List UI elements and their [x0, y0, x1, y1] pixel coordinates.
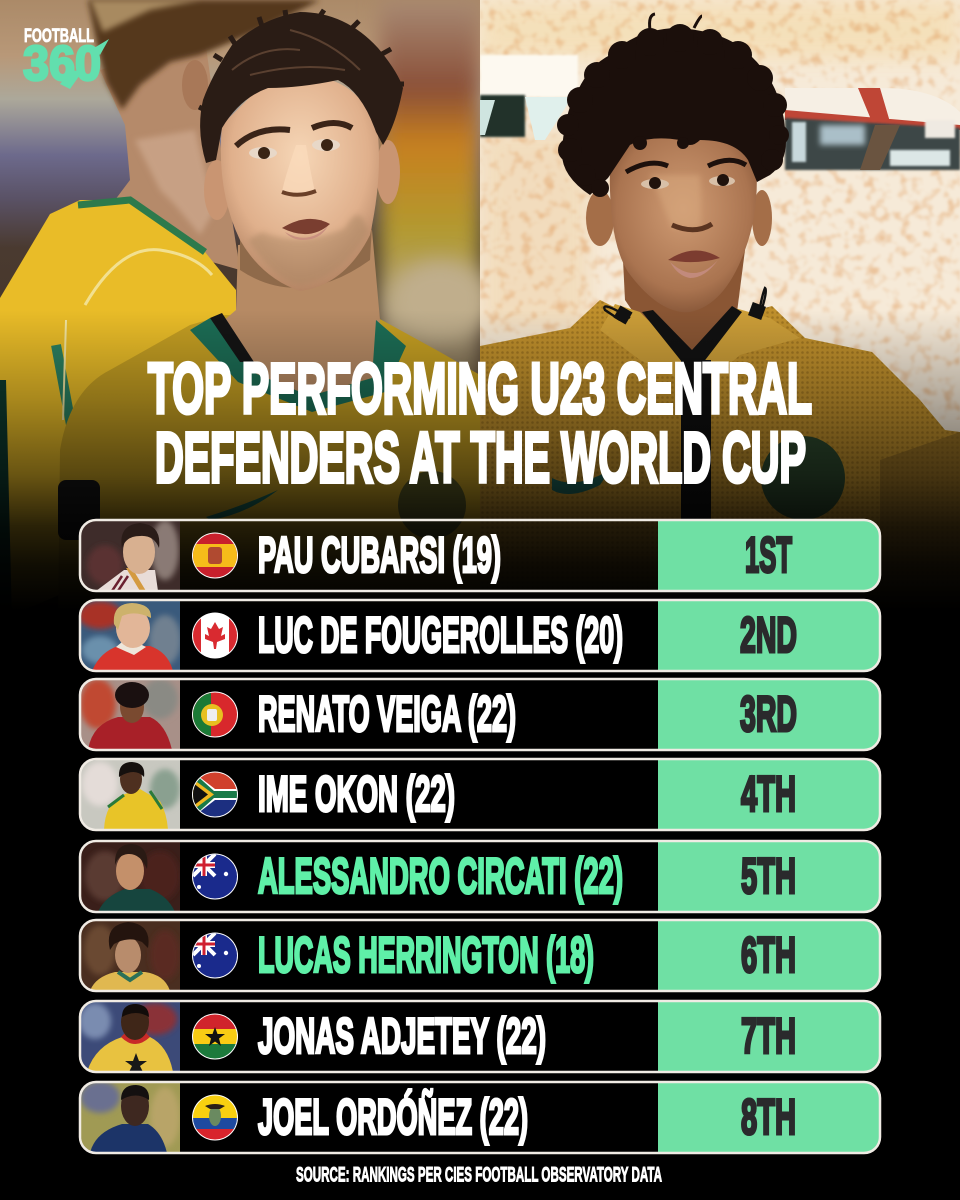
rank: 2ND — [740, 607, 797, 663]
rank panel — [658, 759, 880, 830]
main player neck — [222, 230, 380, 396]
player name: LUC DE FOUGEROLLES (20) — [258, 607, 623, 663]
flag: Portugal — [192, 692, 238, 738]
player name: ALESSANDRO CIRCATI (22) — [258, 848, 623, 904]
right player shirt — [480, 300, 960, 580]
player name: JOEL ORDÓÑEZ (22) — [258, 1089, 528, 1145]
right player nose and mouth — [672, 224, 712, 230]
main player shirt — [60, 315, 480, 570]
main player face — [221, 80, 379, 291]
rank panel — [658, 920, 880, 991]
logo swish — [60, 39, 109, 89]
player name: LUCAS HERRINGTON (18) — [258, 927, 594, 983]
rank panel — [658, 1001, 880, 1072]
right player hair — [557, 14, 789, 197]
player name: RENATO VEIGA (22) — [258, 686, 516, 742]
shirt badge — [761, 436, 845, 520]
main player mouth — [282, 219, 330, 234]
player name: IME OKON (22) — [258, 766, 455, 822]
dark gradient overlay — [0, 310, 960, 610]
row border — [80, 679, 880, 750]
right player ears — [586, 190, 614, 246]
player photo — [80, 1081, 180, 1153]
right player neck — [623, 250, 745, 350]
stadium structure left — [480, 55, 578, 97]
flag: Ghana — [192, 1014, 238, 1060]
rank panel — [658, 841, 880, 912]
sleeve shadow — [880, 432, 960, 514]
main player nose — [282, 163, 314, 192]
flag: Canada — [192, 612, 238, 658]
player photo — [78, 600, 181, 671]
row 6: Lucas Herrington — [80, 920, 880, 991]
drawstrings — [604, 288, 766, 320]
rank: 4TH — [741, 766, 796, 822]
player photo — [81, 759, 180, 830]
shirt details — [206, 490, 278, 520]
background photo: left player — [0, 0, 490, 620]
player name: PAU CUBARSI (19) — [258, 527, 501, 583]
rank panel — [658, 1082, 880, 1153]
rank: 6TH — [741, 927, 796, 983]
source note: SOURCE: RANKINGS PER CIES FOOTBALL OBSERVATORY DATA — [296, 1164, 662, 1186]
main player eyes — [236, 129, 290, 146]
right player face — [610, 134, 757, 312]
main player collar — [190, 318, 406, 412]
rank: 7TH — [741, 1008, 796, 1064]
rank: 8TH — [741, 1089, 796, 1145]
right player eyes — [626, 163, 668, 172]
row 5: Alessandro Circati — [80, 841, 880, 912]
player photo — [79, 1001, 180, 1072]
flag: Ecuador — [192, 1094, 238, 1140]
main player ears — [204, 160, 230, 220]
flag: South Africa — [192, 772, 238, 818]
stadium structure right — [785, 88, 960, 125]
row border — [80, 1001, 880, 1072]
row border — [80, 1082, 880, 1153]
title — [148, 350, 812, 498]
row 1: Pau Cubarsi — [80, 520, 880, 591]
row 2: Luc de Fougerolles — [78, 600, 880, 671]
rank: 1ST — [745, 527, 792, 583]
row 7: Jonas Adjetey — [79, 1001, 880, 1072]
back player shirt — [0, 200, 236, 620]
player photo — [81, 520, 180, 591]
player name: JONAS ADJETEY (22) — [258, 1008, 546, 1064]
row 4: Ime Okon — [80, 759, 880, 830]
row border — [80, 520, 880, 591]
flag: Australia — [192, 854, 238, 900]
background photo: right player — [480, 0, 960, 620]
hood and zip — [600, 304, 800, 380]
row border — [80, 920, 880, 991]
row 8: Joel Ordonez — [80, 1081, 880, 1153]
logo wordmark: FOOTBALL — [24, 26, 94, 47]
player photo — [80, 679, 180, 750]
rank panel — [658, 600, 880, 671]
rank panel — [658, 520, 880, 591]
back player neck and head — [100, 40, 240, 270]
row border — [80, 841, 880, 912]
rank: 3RD — [740, 686, 797, 742]
row border — [80, 600, 880, 671]
player photo — [81, 920, 180, 991]
logo 360: 360 — [23, 37, 101, 91]
rank panel — [658, 679, 880, 750]
player photo — [81, 841, 180, 912]
rank: 5TH — [741, 848, 796, 904]
logo: Football 360 — [23, 26, 109, 91]
flag: Spain — [192, 532, 238, 578]
flag: Australia — [192, 932, 238, 978]
row border — [80, 759, 880, 830]
row 3: Renato Veiga — [80, 679, 880, 750]
main player hair — [199, 10, 404, 163]
